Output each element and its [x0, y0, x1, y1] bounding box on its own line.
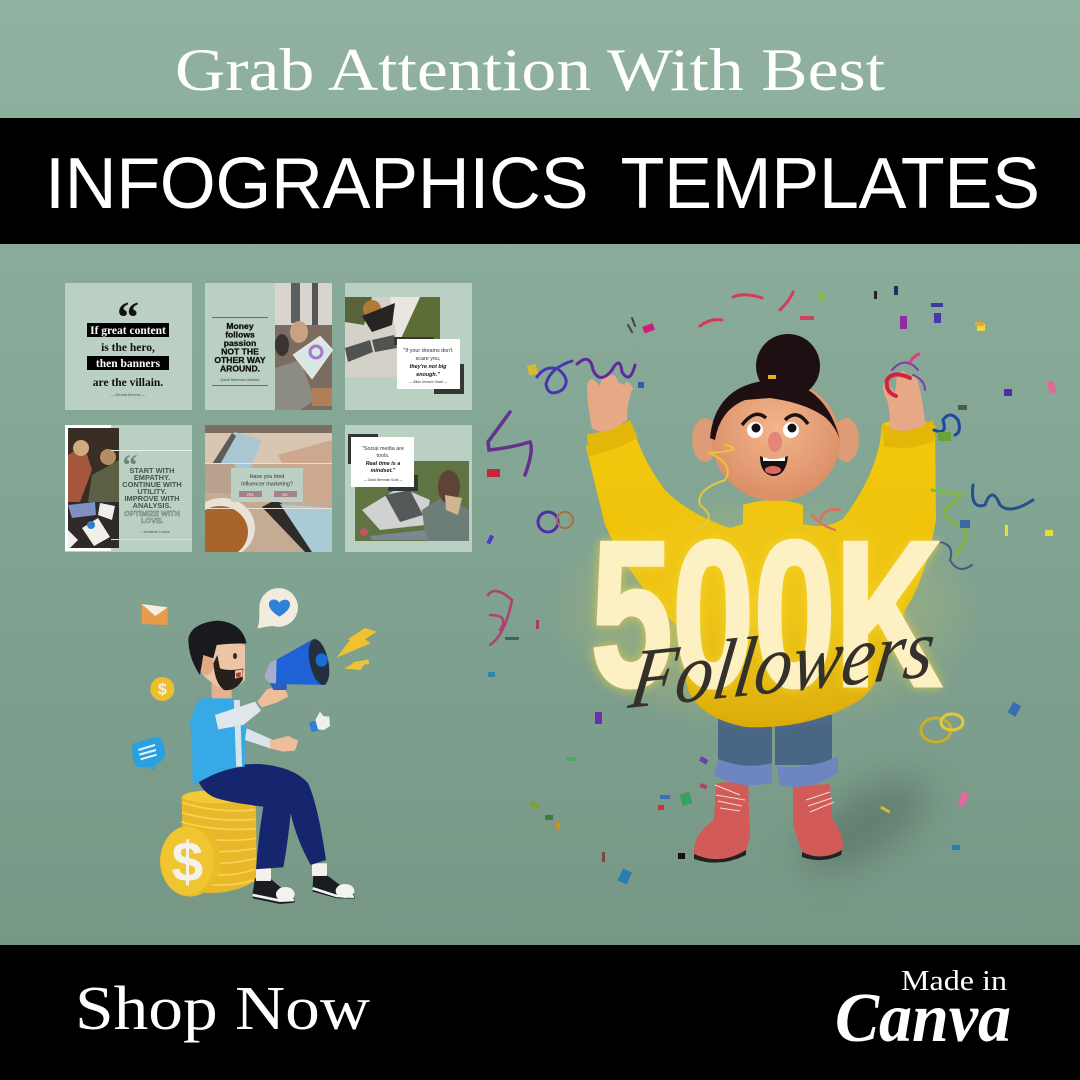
panel: template 4 quote with photo: ~ Jonathan Lisbon — [140, 530, 170, 534]
trousers — [198, 764, 326, 869]
panel: template 6 quote with photo: tools. — [377, 453, 389, 459]
panel: template 1 quote — [65, 283, 192, 410]
sweater cuffs — [587, 420, 936, 456]
panel: template 3 quote with photo: scare you, — [416, 356, 441, 362]
coin stack — [160, 790, 257, 897]
head — [188, 621, 247, 698]
call to action: shop now: Shop Now — [75, 975, 370, 1043]
panel: template 6 quote with photo: "Social media are — [362, 446, 404, 452]
icon: lightning bolts — [337, 628, 377, 670]
panel: template 1 quote: If great content — [90, 325, 166, 337]
shorts — [714, 715, 838, 787]
sweater — [586, 418, 936, 727]
big number: 500K: 500K — [591, 499, 941, 729]
panel: template 4 quote with photo: IMPROVE WITH — [124, 494, 180, 503]
shirt — [190, 695, 247, 786]
panel: template 4 quote with photo: ANALYSIS. — [133, 501, 171, 510]
panel: template 5 influencer marketing: NO — [282, 493, 288, 497]
icon: dollar coin — [150, 677, 174, 701]
panel: template 3 quote with photo: "If your dreams don't — [403, 348, 453, 354]
panel: template 6 quote with photo — [345, 425, 472, 552]
panel: template 3 quote with photo: enough." — [416, 372, 440, 378]
panel: template 4 quote with photo: EMPATHY. — [134, 473, 170, 482]
panel: template 1 quote: are the villain. — [93, 377, 163, 389]
panel: template 4 quote with photo: UTILITY. — [137, 487, 167, 496]
panel: template 2 quote with photo: follows — [225, 330, 255, 340]
panel: template 2 quote with photo: Money — [226, 321, 254, 331]
panel: template 4 quote with photo — [65, 425, 192, 552]
panel: template 4 quote with photo: CONTINUE WITH — [122, 480, 182, 489]
script label: followers: Followers — [623, 601, 941, 727]
panel: template 6 quote with photo: mindset." — [371, 468, 396, 474]
panel: template 4 quote with photo: OPTIMIZE WITH — [124, 509, 180, 518]
panel: template 3 quote with photo — [345, 283, 472, 410]
icon: heart speech bubble — [257, 588, 298, 628]
panel: template 4 quote with photo: START WITH — [129, 466, 175, 475]
panel: template 5 influencer marketing: Influencer marketing? — [241, 482, 293, 488]
badge: made in canva: Canva — [835, 980, 1011, 1057]
shirt placket — [234, 700, 242, 767]
panel: template 2 quote with photo: - David Meerman Garland - — [219, 378, 262, 382]
panel: template 5 influencer marketing: YES — [246, 493, 254, 497]
arm with megaphone — [215, 637, 333, 752]
panel: template 6 quote with photo: Real time is a — [366, 461, 400, 467]
head — [692, 334, 859, 501]
hands — [587, 371, 925, 432]
glow behind 500K — [550, 492, 980, 732]
panel: template 6 quote with photo: — David Meerman Scott — — [364, 478, 403, 482]
panel: template 4 quote with photo: “ — [122, 449, 138, 482]
icon: thumbs up — [309, 712, 330, 732]
shoes — [253, 863, 355, 904]
panel: template 1 quote: “ — [117, 293, 139, 342]
panel: template 2 quote with photo: NOT THE — [221, 346, 259, 356]
confetti ribbons — [488, 292, 1033, 742]
icon: chat bubble — [132, 737, 165, 770]
illustration: man with megaphone — [132, 588, 377, 904]
template thumbnail grid — [65, 283, 472, 558]
panel: template 1 quote: is the hero, — [101, 342, 155, 354]
panel: template 5 influencer marketing: Have you tried — [250, 474, 284, 480]
boot laces — [715, 785, 834, 812]
panel: template 2 quote with photo: passion — [224, 338, 256, 348]
shadow: girl floor shadow — [790, 762, 940, 888]
panel: template 3 quote with photo: they're not big — [410, 364, 447, 370]
confetti pieces — [486, 286, 1057, 884]
panel: template 3 quote with photo: — Jillian Johnson Smart — — [409, 380, 448, 384]
heading band — [0, 118, 1080, 244]
coin stack: $ — [172, 832, 203, 895]
badge: made in canva: Made in — [901, 966, 1007, 997]
panel: template 1 quote: — Michael Brenner — — [111, 393, 146, 397]
boots — [694, 781, 843, 863]
heading: infographics templates: INFOGRAPHICS TEMPLATES — [45, 144, 1040, 224]
panel: template 4 quote with photo: LOVE. — [141, 516, 163, 525]
title: grab attention: Grab Attention With Best — [175, 37, 885, 103]
illustration: girl in yellow sweater — [586, 334, 936, 863]
panel: template 2 quote with photo — [205, 283, 332, 410]
panel: template 2 quote with photo: AROUND. — [220, 364, 260, 374]
panel: template 2 quote with photo: OTHER WAY — [214, 355, 266, 365]
icon: dollar coin: $ — [158, 682, 167, 699]
footer band — [0, 945, 1080, 1080]
icon: envelope — [142, 604, 168, 625]
panel: template 1 quote: then banners — [96, 358, 161, 370]
panel: template 5 influencer marketing — [205, 425, 332, 552]
